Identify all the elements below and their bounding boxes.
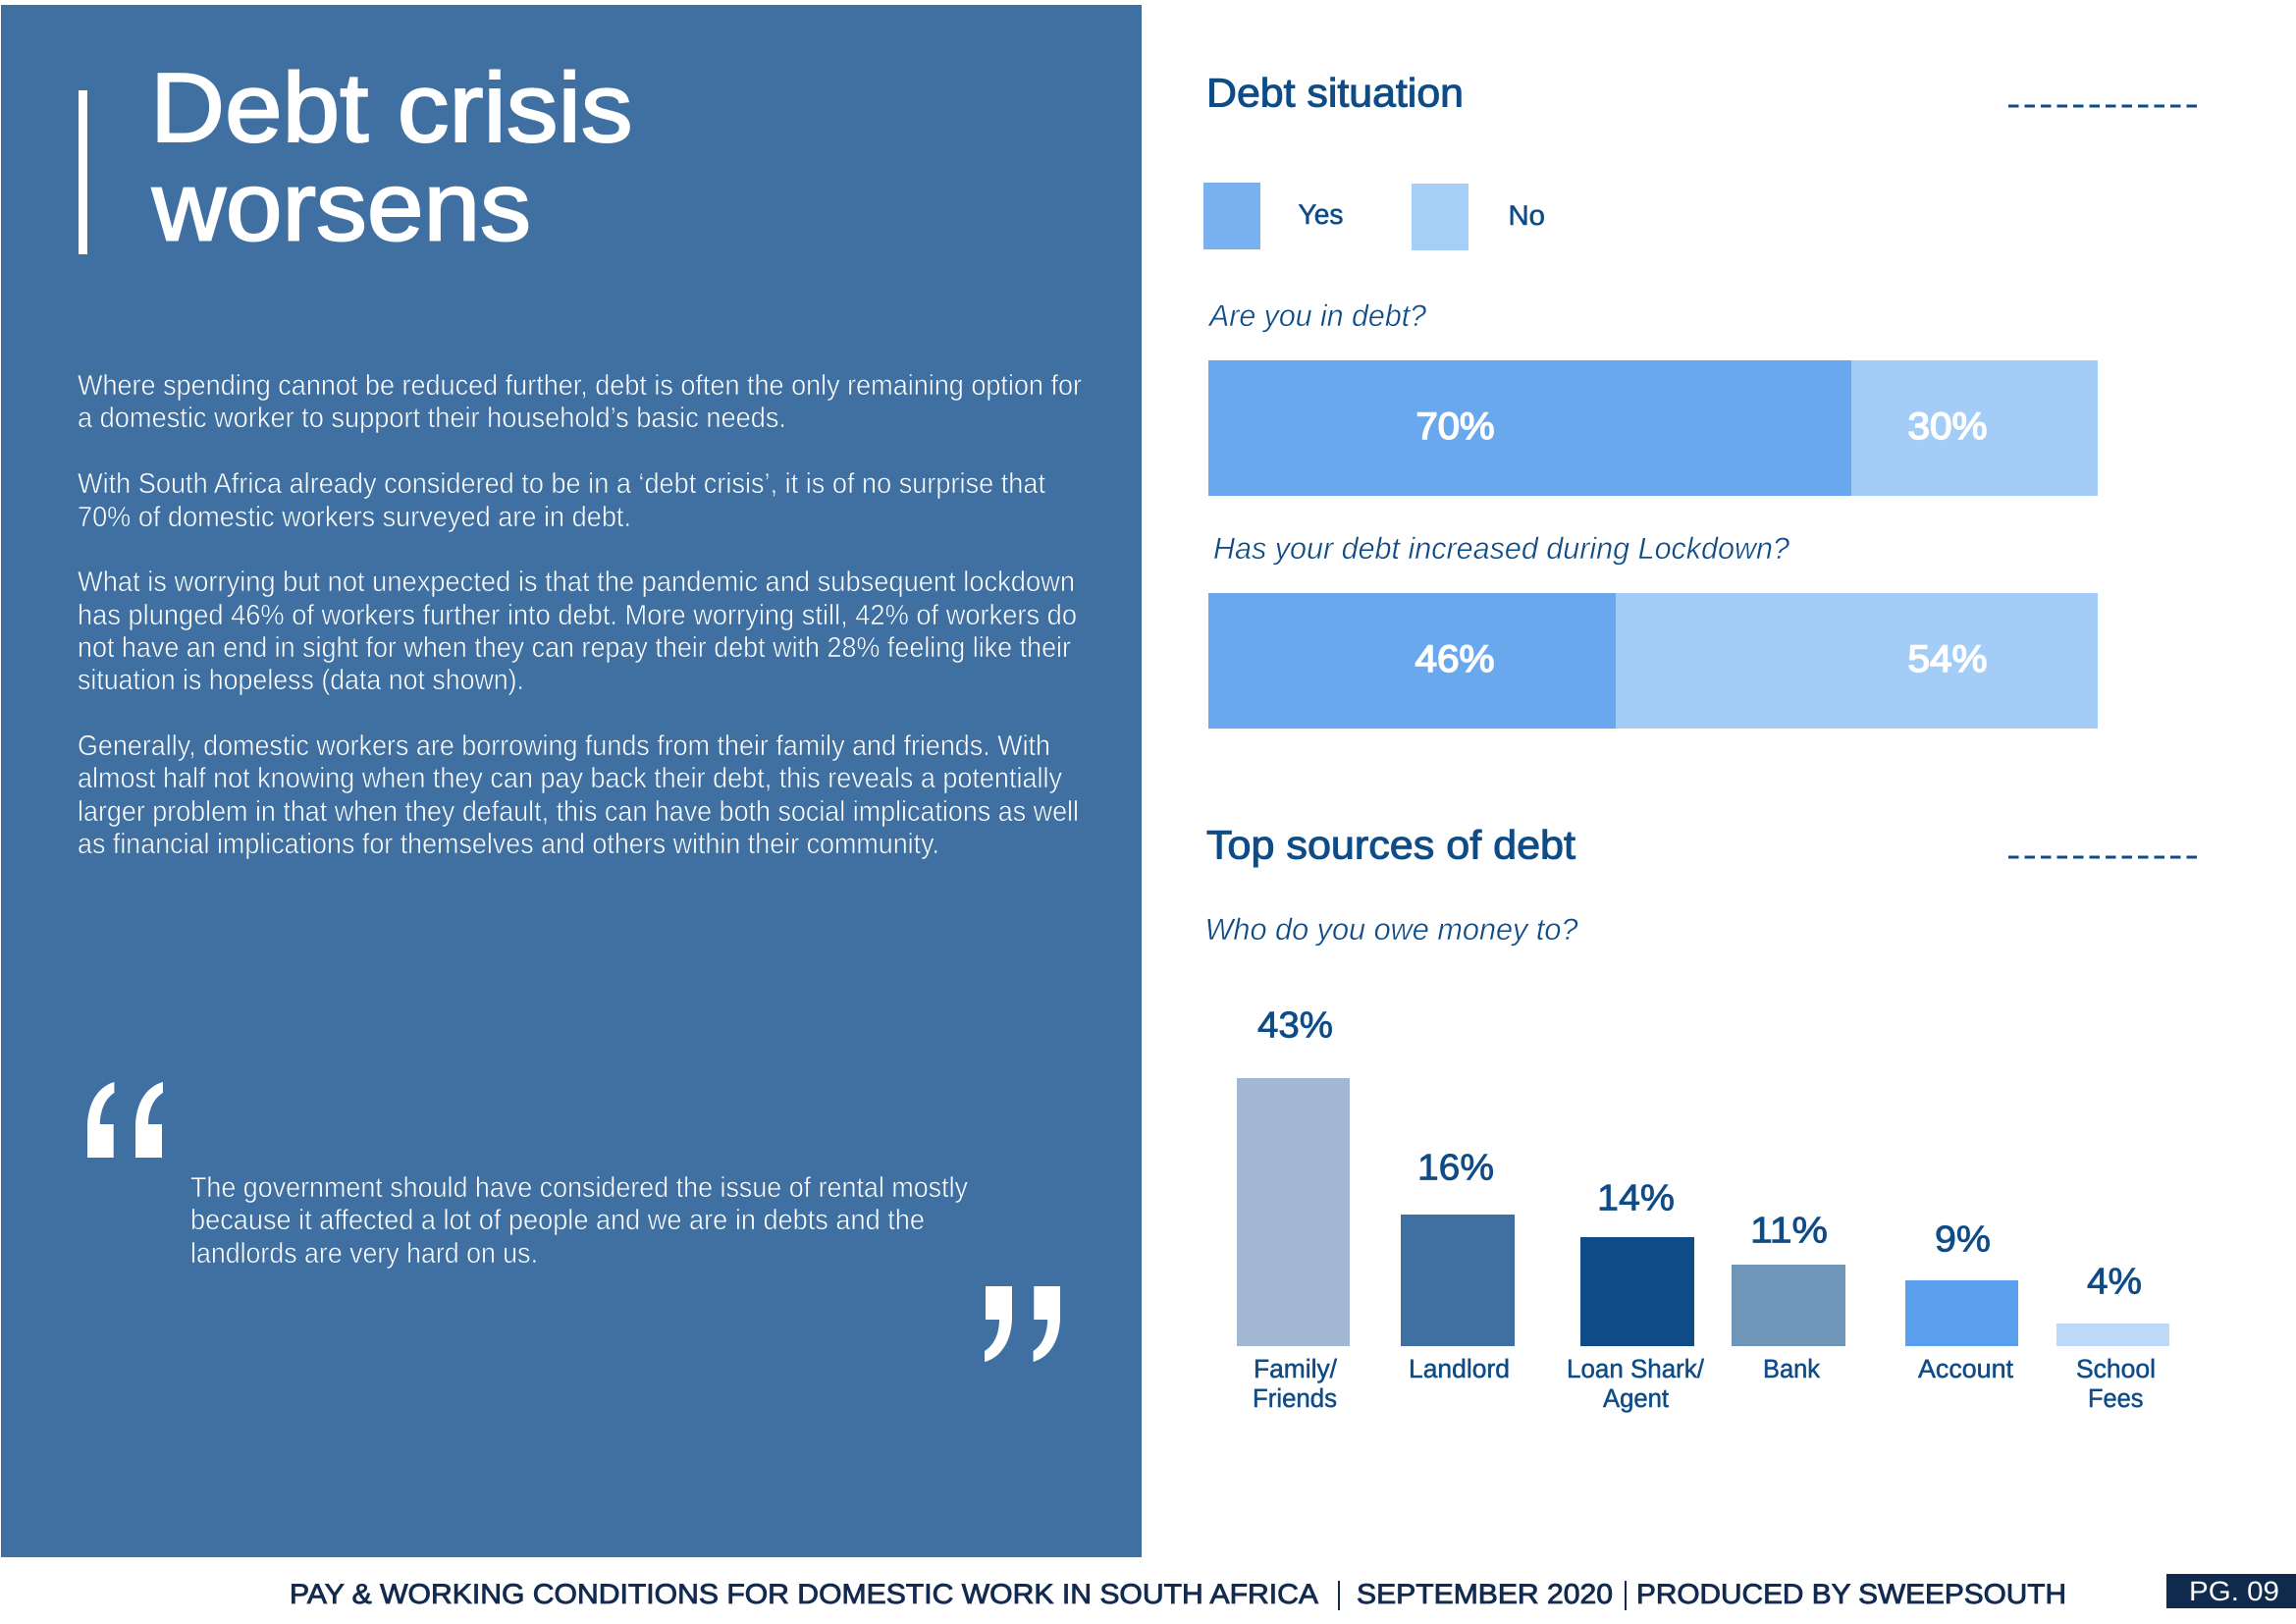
bar: landlord: Landlord	[1409, 1354, 1510, 1383]
icon: opening quotation mark	[87, 1082, 163, 1158]
legend label: yes: Yes	[1298, 199, 1343, 231]
footer: PRODUCED BY SWEEPSOUTH	[1636, 1579, 2066, 1610]
bar: school fees: School	[2076, 1354, 2156, 1383]
quote text: landlords are very hard on us.	[190, 1238, 538, 1270]
heading: top sources of debt: Top sources of debt	[1206, 823, 1576, 868]
bar chart: top sources of debt	[1237, 1003, 2169, 1413]
page number badge: PG. 09	[2189, 1576, 2279, 1606]
title: worsens	[151, 151, 531, 261]
bar: family and friends: 43%	[1257, 1003, 1333, 1045]
bar: school fees: 4%	[2087, 1261, 2142, 1302]
quote text: because it affected a lot of people and we are in debts and the	[190, 1205, 925, 1236]
quote text	[190, 1172, 968, 1270]
bar: account	[1905, 1218, 2018, 1383]
bar: bank: Bank	[1763, 1354, 1821, 1383]
footer: SEPTEMBER 2020	[1357, 1579, 1613, 1610]
body text	[78, 370, 1082, 860]
title	[150, 53, 632, 261]
legend swatch: yes	[1203, 183, 1260, 249]
body text: a domestic worker to support their household’s basic needs.	[78, 403, 786, 434]
body text: Where spending cannot be reduced further, debt is often the only remaining option for	[78, 370, 1082, 402]
body text: Generally, domestic workers are borrowing funds from their family and friends. With	[78, 731, 1050, 762]
bar: loan shark or agent: Loan Shark/	[1567, 1354, 1705, 1383]
question: are you in debt: Are you in debt?	[1207, 298, 1427, 333]
heading: debt situation: Debt situation	[1206, 71, 1464, 116]
body text: has plunged 46% of workers further into debt. More worrying still, 42% of workers do	[78, 600, 1077, 631]
stacked bar: are you in debt	[1208, 360, 2098, 496]
body text: With South Africa already considered to be in a ‘debt crisis’, it is of no surprise that	[78, 468, 1045, 500]
footer: PAY & WORKING CONDITIONS FOR DOMESTIC WORK IN SOUTH AFRICA	[290, 1579, 1318, 1610]
bar: family and friends: Friends	[1253, 1383, 1337, 1413]
bar: loan shark or agent	[1567, 1176, 1705, 1413]
bar: loan shark or agent: Agent	[1603, 1383, 1670, 1413]
bar: family and friends: Family/	[1254, 1354, 1338, 1383]
bar: school fees	[2056, 1261, 2169, 1413]
stacked bar: are you in debt: 30%	[1908, 406, 1987, 448]
bar: loan shark or agent: 14%	[1597, 1176, 1675, 1218]
question: has your debt increased: Has your debt increased during Lockdown?	[1213, 531, 1790, 566]
page number badge	[2166, 1574, 2296, 1608]
bar: landlord	[1401, 1147, 1515, 1383]
quote text: The government should have considered the issue of rental mostly	[190, 1172, 968, 1204]
footer	[290, 1579, 2066, 1610]
stacked bar: debt increased during lockdown: 54%	[1908, 638, 1987, 680]
question: who do you owe money to: Who do you owe money to?	[1205, 912, 1578, 947]
accent bar beside title	[79, 90, 87, 254]
legend swatch: no	[1412, 184, 1468, 250]
body text: What is worrying but not unexpected is that the pandemic and subsequent lockdown	[78, 567, 1075, 598]
body text: not have an end in sight for when they can repay their debt with 28% feeling like their	[78, 632, 1071, 664]
body text: 70% of domestic workers surveyed are in debt.	[78, 502, 631, 533]
bar: school fees: Fees	[2088, 1383, 2144, 1413]
bar: bank	[1732, 1210, 1845, 1383]
body text: situation is hopeless (data not shown).	[78, 665, 524, 696]
legend label: no: No	[1508, 200, 1545, 232]
stacked bar: are you in debt: 70%	[1415, 406, 1494, 448]
body text: almost half not knowing when they can pay back their debt, this reveals a potentially	[78, 763, 1062, 794]
stacked bar: debt increased during lockdown	[1208, 593, 2098, 729]
panel: left blue narrative panel	[1, 5, 1142, 1557]
bar: bank: 11%	[1750, 1210, 1828, 1251]
icon: closing quotation mark	[985, 1286, 1060, 1362]
title: Debt crisis	[150, 53, 632, 163]
bar: landlord: 16%	[1417, 1147, 1494, 1188]
body text: larger problem in that when they default, this can have both social implications as well	[78, 796, 1079, 828]
legend	[1203, 183, 1545, 250]
bar: family and friends	[1237, 1003, 1350, 1413]
bar: account: 9%	[1935, 1218, 1991, 1259]
bar: account: Account	[1918, 1354, 2014, 1383]
body text: as financial implications for themselves and others within their community.	[78, 829, 939, 860]
stacked bar: debt increased during lockdown: 46%	[1415, 638, 1494, 680]
